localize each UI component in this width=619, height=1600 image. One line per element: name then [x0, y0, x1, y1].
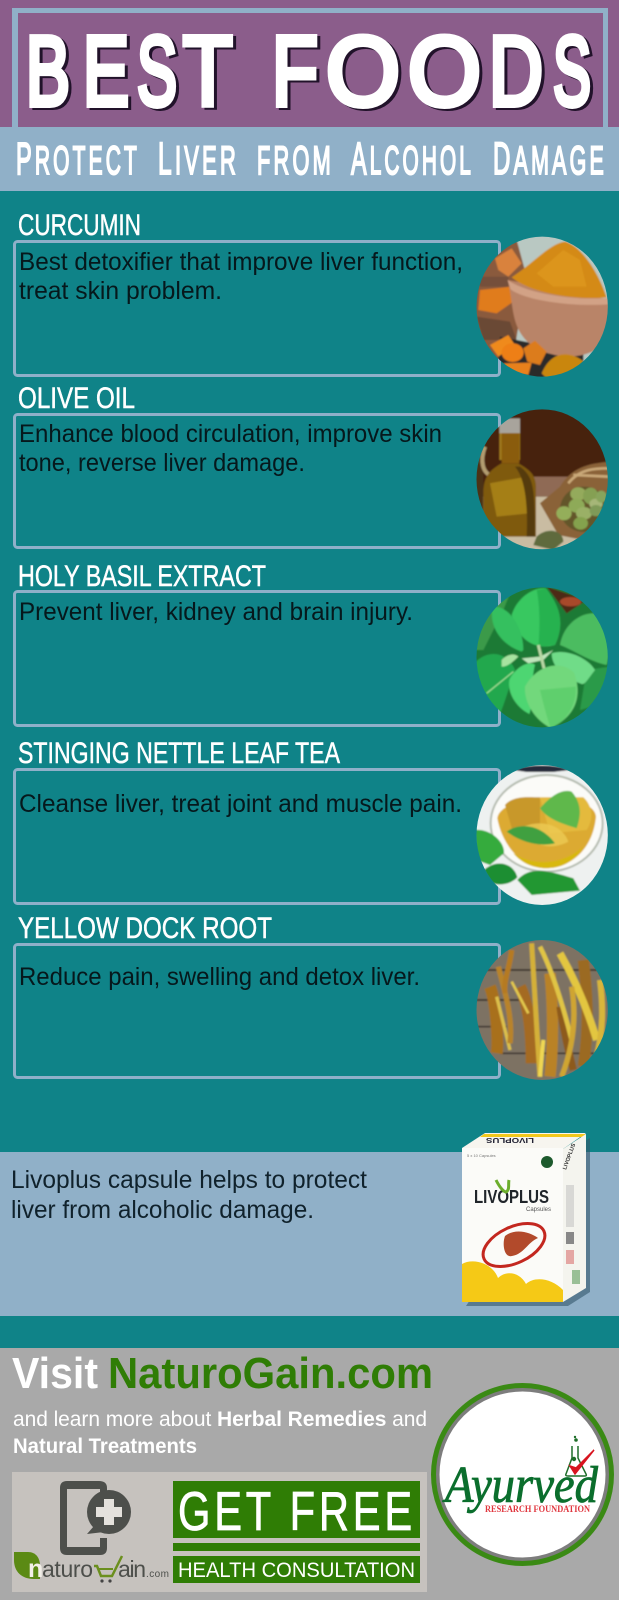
subtitle: FROM: [257, 139, 334, 183]
title: E: [83, 16, 129, 126]
title: S: [137, 16, 177, 126]
banner: health consultation: HEALTH CONSULTATION: [178, 1559, 415, 1582]
footer heading: visit naturogain: Visit: [12, 1349, 98, 1398]
logo: naturogain: ain: [118, 1556, 146, 1582]
text: livoplus: Livoplus capsule helps to protect: [11, 1166, 367, 1194]
logo: ayurved research foundation: RESEARCH FOUNDATION: [485, 1504, 590, 1514]
footer heading: visit naturogain: NaturoGain.com: [108, 1349, 433, 1398]
text: holy basil benefits: Prevent liver, kidney and brain injury.: [19, 598, 413, 626]
text box: curcumin: [14, 242, 500, 376]
text box: nettle tea: [14, 770, 500, 904]
title: F: [272, 16, 318, 126]
footer text: learn more: and learn more about Herbal Remedies and: [13, 1408, 427, 1431]
logo: naturogain: n: [28, 1555, 43, 1583]
panel: curcumin: [14, 209, 613, 380]
icon: livoplus product box: [462, 1133, 590, 1306]
logo: ayurved research foundation: [434, 1386, 611, 1563]
icon: yellow dock root photo: [476, 940, 608, 1080]
heading: yellow dock root: YELLOW DOCK ROOT: [18, 912, 272, 945]
text: olive oil benefits: tone, reverse liver damage.: [19, 449, 305, 477]
icon: livoplus product box: LIVOPLUS: [486, 1136, 534, 1143]
logo: naturogain: [14, 1552, 169, 1583]
divider bar: [173, 1543, 420, 1551]
text: livoplus: liver from alcoholic damage.: [11, 1196, 314, 1224]
panel: yellow dock root: [14, 912, 613, 1083]
text: nettle tea benefits: Cleanse liver, treat joint and muscle pain.: [19, 790, 462, 818]
text: curcumin benefits: treat skin problem.: [19, 277, 222, 305]
title: T: [183, 16, 231, 126]
panel: stinging nettle leaf tea: [14, 737, 613, 910]
title: D: [489, 16, 543, 126]
panel: livoplus promo: [0, 1133, 619, 1316]
text: yellow dock benefits: Reduce pain, swelling and detox liver.: [19, 963, 420, 991]
title: B: [26, 16, 70, 126]
logo: naturogain: .com: [146, 1569, 169, 1580]
icon: phone with medical chat bubble: [60, 1481, 131, 1555]
icon: nettle tea photo: [476, 765, 608, 905]
heading: olive oil: OLIVE OIL: [18, 382, 135, 415]
footer text: learn more: Natural Treatments: [13, 1435, 197, 1458]
logo: naturogain: aturo: [42, 1556, 93, 1582]
title: O: [326, 16, 400, 126]
subtitle: PROTECT: [16, 133, 140, 184]
icon: livoplus product box: LIVOPLUS: [562, 1142, 577, 1171]
icon: olive oil photo: [476, 409, 608, 550]
header: title banner: [0, 0, 619, 127]
call to action panel: [12, 1472, 427, 1592]
icon: turmeric pot photo: [476, 236, 608, 377]
icon: holy basil photo: [476, 587, 608, 728]
icon: livoplus product box: LIVOPLUS: [474, 1187, 549, 1207]
panel: olive oil: [14, 382, 613, 553]
subtitle: ALCOHOL: [351, 133, 474, 184]
panel: footer: [0, 1348, 619, 1600]
title: O: [408, 16, 481, 126]
subtitle: LIVER: [158, 133, 239, 184]
title: S: [553, 16, 591, 126]
text box: yellow dock root: [14, 944, 500, 1078]
heading: holy basil extract: HOLY BASIL EXTRACT: [18, 560, 266, 593]
banner: get free: GET FREE: [178, 1480, 416, 1542]
heading: curcumin: CURCUMIN: [18, 209, 141, 242]
text box: olive oil: [14, 414, 500, 548]
text box: holy basil: [14, 592, 500, 726]
logo: ayurved research foundation: Ayurved: [442, 1457, 599, 1514]
subtitle: [16, 133, 607, 184]
text: curcumin benefits: Best detoxifier that improve liver function,: [19, 248, 463, 276]
icon: livoplus product box: 5 x 10 Capsules: [467, 1153, 496, 1158]
text: olive oil benefits: Enhance blood circulation, improve skin: [19, 420, 442, 448]
icon: livoplus product box: Capsules: [526, 1207, 551, 1213]
panel: holy basil extract: [14, 560, 613, 730]
heading: stinging nettle leaf tea: STINGING NETTLE LEAF TEA: [18, 737, 340, 770]
subtitle band: [0, 127, 619, 191]
